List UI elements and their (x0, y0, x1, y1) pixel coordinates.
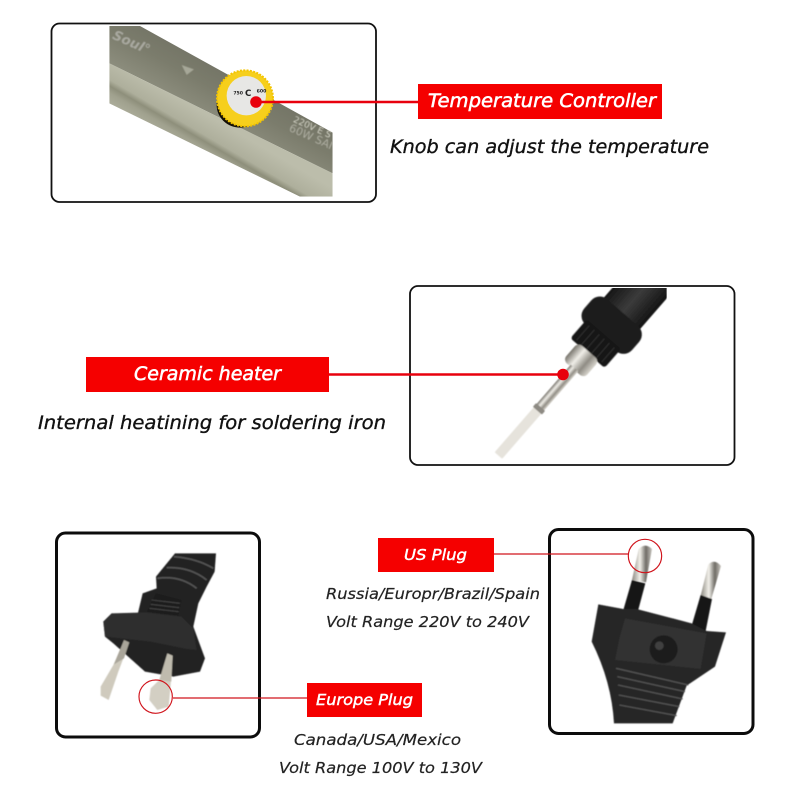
text: Europe plug details (279, 731, 483, 777)
connector: US plug (494, 553, 628, 555)
text: Europe plug details: Canada/USA/Mexico (294, 731, 461, 749)
temperature knob: 600 (257, 89, 267, 95)
temperature knob (217, 70, 273, 128)
soldering iron barrel: 220V E S (291, 115, 333, 141)
label: Ceramic heater: Ceramic heater (134, 363, 282, 385)
soldering iron barrel: 60W SAI (287, 122, 335, 152)
panel: temperature controller photo (52, 24, 376, 202)
text: US plug details: Russia/Europr/Brazil/Spain (326, 585, 540, 603)
panel: flat-pin plug photo (56, 533, 260, 737)
panel: ceramic heater photo (410, 210, 734, 476)
flat-pin plug illustration (101, 553, 216, 713)
round-pin plug illustration (592, 539, 726, 723)
connector: ceramic heater (329, 369, 569, 380)
text: US plug details (326, 585, 540, 631)
temperature knob: C (245, 89, 251, 99)
text: Europe plug details: Volt Range 100V to 130V (279, 759, 483, 777)
temperature knob: 750 (233, 90, 244, 96)
text: knob description: Knob can adjust the temperature (390, 136, 709, 158)
label: Ceramic heater (86, 357, 329, 392)
label: US Plug (378, 538, 494, 572)
label: Temperature Controller (418, 84, 662, 119)
label: Europe Plug (307, 683, 422, 717)
soldering iron barrel: Soul° (110, 28, 152, 58)
connector: Europe plug (173, 697, 307, 699)
text: US plug details: Volt Range 220V to 240V (326, 613, 530, 631)
label: Europe Plug: Europe Plug (316, 691, 413, 709)
label: Temperature Controller: Temperature Controller (428, 90, 657, 112)
label: US Plug: US Plug (404, 546, 467, 564)
heater illustration (495, 288, 667, 458)
connector: temperature controller (250, 96, 418, 108)
soldering iron barrel (109, 26, 335, 197)
panel: round-pin plug photo (550, 530, 753, 734)
text: heater description: Internal heatining for soldering iron (38, 412, 386, 434)
